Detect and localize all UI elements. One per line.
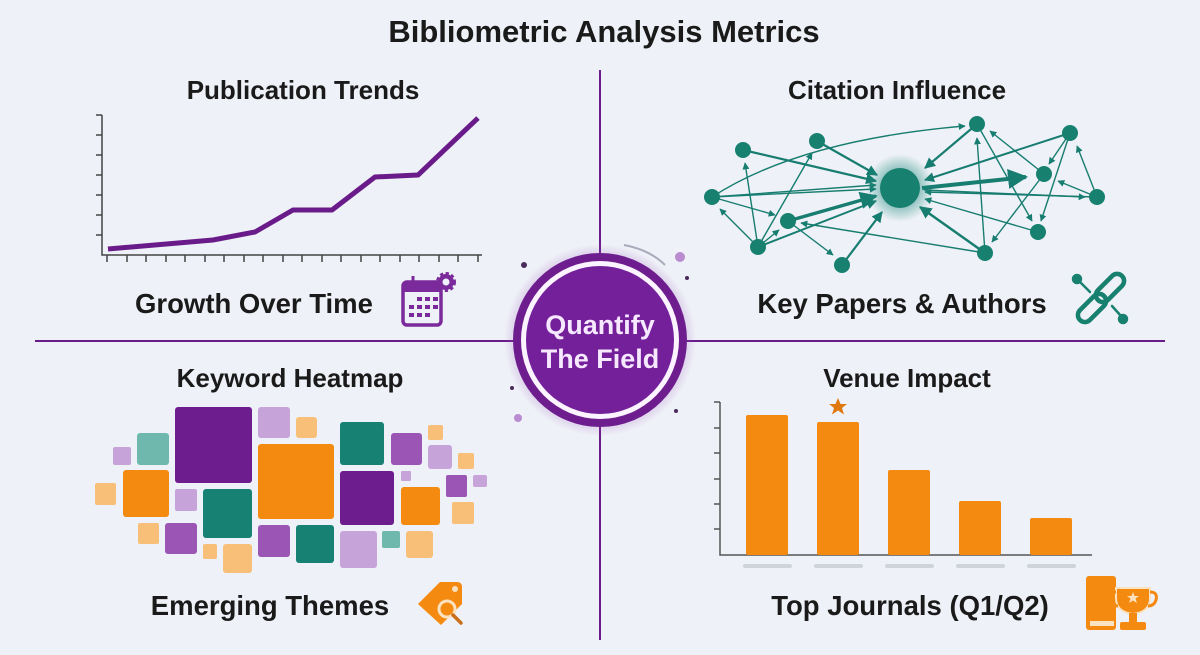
title: Bibliometric Analysis Metrics [388, 14, 820, 49]
icon: tag with magnifier [418, 582, 462, 625]
panel: keyword heatmap [95, 363, 487, 625]
line chart [96, 115, 482, 262]
heading: venue impact: Venue Impact [823, 363, 991, 393]
heatmap [95, 407, 487, 573]
icon: book and trophy [1086, 576, 1156, 630]
icon: star [829, 398, 847, 414]
network diagram [704, 116, 1105, 273]
center badge [504, 244, 696, 436]
heading: citation influence: Citation Influence [788, 75, 1006, 105]
icon: calendar [403, 274, 454, 325]
subtitle: emerging themes: Emerging Themes [151, 590, 389, 621]
subtitle: top journals: Top Journals (Q1/Q2) [771, 590, 1049, 621]
panel: publication trends [96, 75, 482, 325]
heading: publication trends: Publication Trends [187, 75, 419, 105]
center badge: The Field [541, 344, 659, 374]
panel: citation influence [704, 75, 1127, 325]
bar chart [714, 398, 1092, 568]
subtitle: key papers & authors: Key Papers & Authors [757, 288, 1047, 319]
icon: link [1074, 271, 1127, 325]
panel: venue impact [714, 363, 1156, 630]
subtitle: growth over time: Growth Over Time [135, 288, 373, 319]
heading: keyword heatmap: Keyword Heatmap [177, 363, 403, 393]
center badge: Quantify [545, 310, 655, 340]
